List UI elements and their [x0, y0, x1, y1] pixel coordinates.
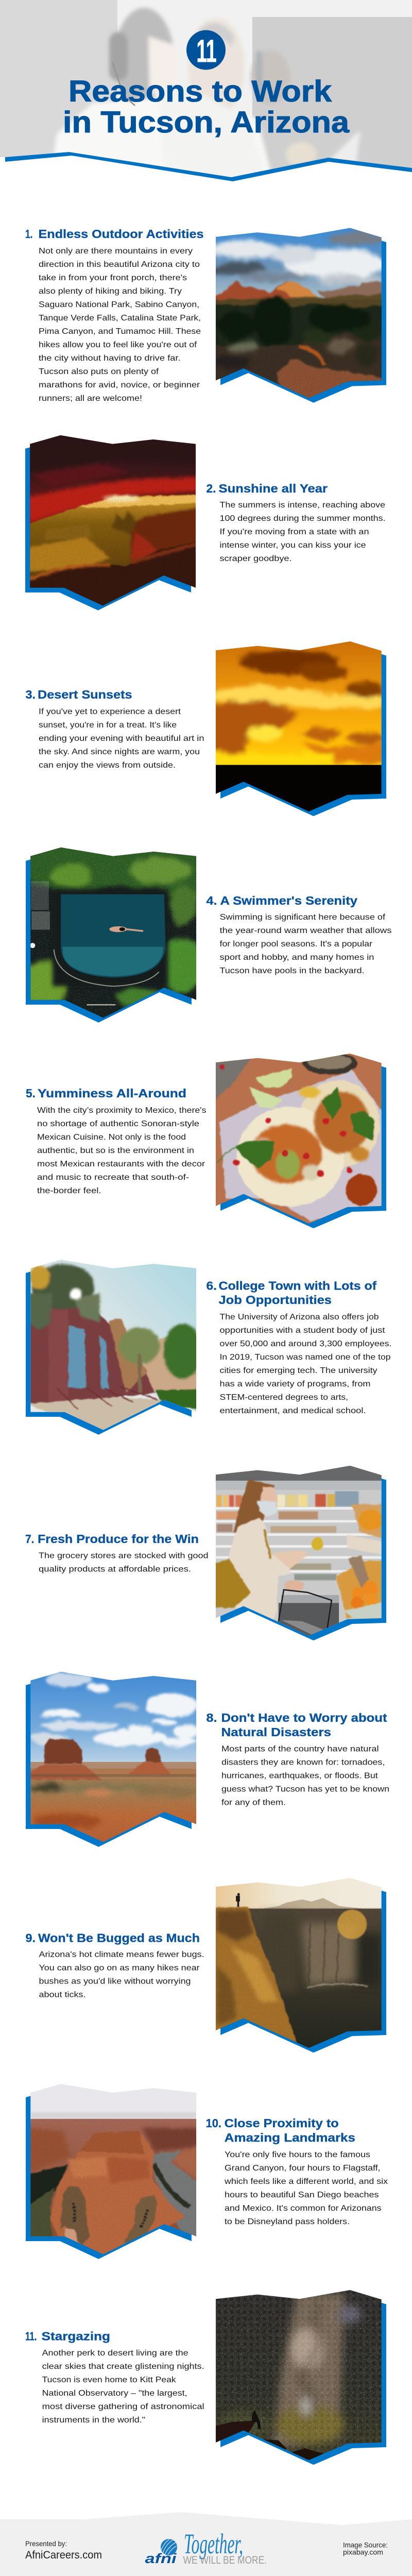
- panel: reason 2: [21, 427, 386, 611]
- body text 5: [37, 1106, 206, 1195]
- body text 6: has a wide variety of programs, from: [219, 1380, 371, 1388]
- body text 5: With the city’s proximity to Mexico, there's: [37, 1106, 206, 1115]
- body text 1: Tucson also puts on plenty of: [39, 367, 159, 376]
- body text 2: 100 degrees during the summer months.: [219, 514, 385, 523]
- body text 5: and music to recreate that south-of-: [37, 1173, 189, 1182]
- body text 2: The summers is intense, reaching above: [219, 501, 385, 510]
- heading 8: 8.: [206, 1711, 217, 1724]
- body text 7: quality products at affordable prices.: [39, 1565, 191, 1573]
- body text 7: The grocery stores are stocked with good: [39, 1552, 208, 1560]
- footer: [0, 2512, 412, 2576]
- body text 1: Tanque Verde Falls, Catalina State Park,: [39, 314, 201, 323]
- body text 10: and Mexico. It's common for Arizonans: [225, 2204, 381, 2213]
- logo: afni together, we will be more: afni: [145, 2551, 177, 2566]
- heading 10: 10.: [206, 2116, 221, 2130]
- heading 8: Don't Have to Worry about: [221, 1711, 387, 1724]
- heading 9: Won't Be Bugged as Much: [38, 1931, 200, 1944]
- number badge: 11: [197, 33, 216, 69]
- photo 7: woman shopping for produce: [205, 1459, 391, 1642]
- body text 1: Not only are there mountains in every: [39, 247, 193, 256]
- body text 8: guess what? Tucson has yet to be known: [221, 1785, 389, 1794]
- body text 1: hikes allow you to feel like you're out of: [39, 341, 197, 349]
- image source: [343, 2541, 388, 2556]
- body text 1: direction in this beautiful Arizona city to: [39, 260, 200, 269]
- panel: reason 3: [26, 634, 391, 816]
- panel: reason 5: [26, 1046, 391, 1230]
- body text 9: [39, 1951, 204, 1999]
- panel: reason 8: [24, 1666, 389, 1848]
- title: Reasons to Work: [68, 75, 332, 108]
- body text 1: [39, 247, 201, 403]
- heading 6: 6.: [206, 1279, 217, 1292]
- heading 5: 5.: [26, 1087, 36, 1100]
- logo: afni together, we will be more: WE WILL BE MORE.: [183, 2554, 267, 2566]
- heading 5: Yumminess All-Around: [38, 1087, 186, 1100]
- body text 11: [42, 2349, 204, 2425]
- panel: reason 1: [25, 221, 391, 404]
- body text 9: about ticks.: [39, 1991, 85, 1999]
- body text 6: opportunities with a student body of just: [219, 1326, 385, 1335]
- body text 11: instruments in the world.": [42, 2416, 145, 2425]
- heading 2: Sunshine all Year: [218, 482, 328, 495]
- heading 3: Desert Sunsets: [38, 688, 132, 701]
- body text 11: most diverse gathering of astronomical: [42, 2402, 204, 2411]
- body text 9: bushes as you'd like without worrying: [39, 1977, 191, 1986]
- body text 6: [219, 1313, 391, 1415]
- body text 10: Grand Canyon, four hours to Flagstaff,: [225, 2164, 380, 2173]
- heading 7: Fresh Produce for the Win: [38, 1532, 199, 1546]
- title: in Tucson, Arizona: [63, 106, 350, 139]
- body text 10: to be Disneyland pass holders.: [225, 2217, 350, 2226]
- body text 4: the year-round warm weather that allows: [219, 926, 391, 935]
- heading 4: 4.: [206, 894, 217, 907]
- photo 6: university brick building with palms: [24, 1254, 202, 1435]
- body text 3: [39, 707, 204, 770]
- body text 6: cities for emerging tech. The university: [219, 1366, 377, 1375]
- body text 10: You're only five hours to the famous: [225, 2150, 370, 2159]
- body text 7: [39, 1552, 208, 1573]
- panel: reason 11: [25, 2283, 391, 2467]
- body text 1: the city without having to drive far.: [39, 354, 180, 363]
- body text 1: also plenty of hiking and biking. Try: [39, 287, 182, 296]
- body text 5: no shortage of authentic Sonoran-style: [37, 1120, 199, 1128]
- heading 10: Amazing Landmarks: [225, 2131, 355, 2144]
- heading 8: [206, 1711, 387, 1739]
- body text 10: hours to beautiful San Diego beaches: [225, 2191, 379, 2199]
- heading 11: Stargazing: [42, 2330, 110, 2343]
- footer background: [0, 2512, 412, 2576]
- body text 1: take in from your front porch, there's: [39, 274, 187, 282]
- photo 10: boots over a river canyon: [24, 2078, 202, 2260]
- image source: Image Source:: [343, 2541, 388, 2549]
- body text 9: Arizona's hot climate means fewer bugs.: [39, 1951, 204, 1959]
- body text 6: The University of Arizona also offers job: [219, 1313, 379, 1321]
- body text 3: can enjoy the views from outside.: [39, 761, 176, 770]
- heading 9: 9.: [26, 1931, 36, 1944]
- body text 4: sport and hobby, and many homes in: [219, 953, 374, 962]
- photo 9: hiker on a canyon cliff: [205, 1871, 391, 2053]
- white mountain cut below header: [0, 152, 412, 185]
- heading 4: A Swimmer's Serenity: [220, 894, 357, 907]
- heading 6: Job Opportunities: [218, 1293, 332, 1307]
- photo 11: milky way night sky: [205, 2283, 391, 2467]
- photo 8: desert buttes: [24, 1666, 202, 1848]
- heading 3: 3.: [26, 688, 36, 701]
- body text 5: the-border feel.: [37, 1187, 101, 1195]
- panel: reason 10: [24, 2078, 388, 2260]
- body text 10: which feels like a different world, and six: [224, 2177, 388, 2186]
- body text 11: Another perk to desert living are the: [42, 2349, 188, 2358]
- header photo: call center agents, faded: [0, 0, 412, 182]
- body text 5: authentic, but so is the environment in: [37, 1146, 194, 1155]
- image source: pixabay.com: [343, 2548, 383, 2556]
- logo: afni together, we will be more: [145, 2529, 267, 2566]
- body text 6: entertainment, and medical school.: [219, 1406, 366, 1415]
- body text 2: If you're moving from a state with an: [219, 528, 369, 536]
- body text 4: for longer pool seasons. It's a popular: [219, 940, 373, 948]
- body text 6: In 2019, Tucson was named one of the top: [219, 1353, 391, 1362]
- blue ridge line: [5, 152, 412, 181]
- title: [63, 75, 350, 139]
- body text 3: ending your evening with beautiful art in: [39, 734, 204, 743]
- body text 3: If you've yet to experience a desert: [39, 707, 181, 716]
- heading 7: 7.: [25, 1532, 34, 1546]
- heading 6: [206, 1279, 376, 1307]
- body text 2: scraper goodbye.: [219, 554, 291, 563]
- body text 8: Most parts of the country have natural: [221, 1744, 379, 1754]
- heading 11: 11.: [25, 2330, 37, 2343]
- body text 1: runners; all are welcome!: [39, 394, 142, 403]
- body text 2: [219, 501, 385, 563]
- body text 1: Saguaro National Park, Sabino Canyon,: [39, 300, 199, 309]
- body text 6: STEM-centered degrees to arts,: [219, 1393, 348, 1402]
- body text 1: marathons for avid, novice, or beginner: [39, 381, 200, 389]
- panel: reason 6: [24, 1254, 392, 1435]
- heading 2: 2.: [206, 482, 216, 495]
- body text 11: National Observatory – "the largest,: [42, 2389, 187, 2398]
- photo 3: orange desert sunset: [215, 641, 386, 816]
- heading 8: Natural Disasters: [221, 1725, 331, 1739]
- heading 10: [206, 2116, 355, 2144]
- body text 9: You can also go on as many hikes near: [39, 1964, 200, 1972]
- body text 4: Swimming is significant here because of: [219, 913, 386, 922]
- panel: reason 9: [26, 1871, 391, 2053]
- body text 6: over 50,000 and around 3,300 employees.: [219, 1340, 391, 1348]
- heading 6: College Town with Lots of: [218, 1279, 376, 1292]
- number badge: [186, 30, 226, 70]
- body text 4: [219, 913, 391, 975]
- body text 3: the sky. And since nights are warm, you: [39, 748, 200, 756]
- body text 5: Mexican Cuisine. Not only is the food: [37, 1133, 186, 1142]
- logo: afni together, we will be more: Together,: [184, 2529, 243, 2560]
- body text 1: Pima Canyon, and Tumamoc Hill. These: [39, 327, 201, 336]
- heading 1: Endless Outdoor Activities: [38, 227, 204, 241]
- heading 10: Close Proximity to: [225, 2116, 339, 2130]
- body text 5: most Mexican restaurants with the decor: [37, 1160, 205, 1168]
- photo 1: red rock landscape: [215, 228, 386, 403]
- panel: reason 7: [25, 1459, 391, 1642]
- body text 3: sunset, you're in for a treat. It's like: [39, 721, 177, 730]
- photo 4: aerial pool with swimmer: [21, 842, 203, 1023]
- body text 8: [221, 1744, 389, 1807]
- body text 8: disasters they are known for: tornadoes,: [221, 1758, 385, 1767]
- photo 2: canyon arch at sunrise: [25, 435, 196, 611]
- body text 8: for any of them.: [221, 1798, 286, 1807]
- body text 10: [224, 2150, 388, 2226]
- body text 11: Tucson is even home to Kitt Peak: [42, 2376, 177, 2384]
- body text 2: intense winter, you can kiss your ice: [219, 541, 366, 550]
- body text 4: Tucson have pools in the backyard.: [219, 967, 365, 975]
- panel: reason 4: [21, 842, 392, 1023]
- presented by: [25, 2539, 102, 2561]
- presented by: Presented by:: [25, 2539, 67, 2548]
- header banner: [0, 0, 412, 185]
- heading 1: 1.: [25, 227, 33, 241]
- body text 8: hurricanes, earthquakes, or floods. But: [221, 1771, 378, 1781]
- photo 5: tacos on a board: [205, 1046, 391, 1230]
- body text 11: clear skies that create glistening nights.: [42, 2362, 204, 2371]
- presented by: AfniCareers.com: [25, 2549, 102, 2561]
